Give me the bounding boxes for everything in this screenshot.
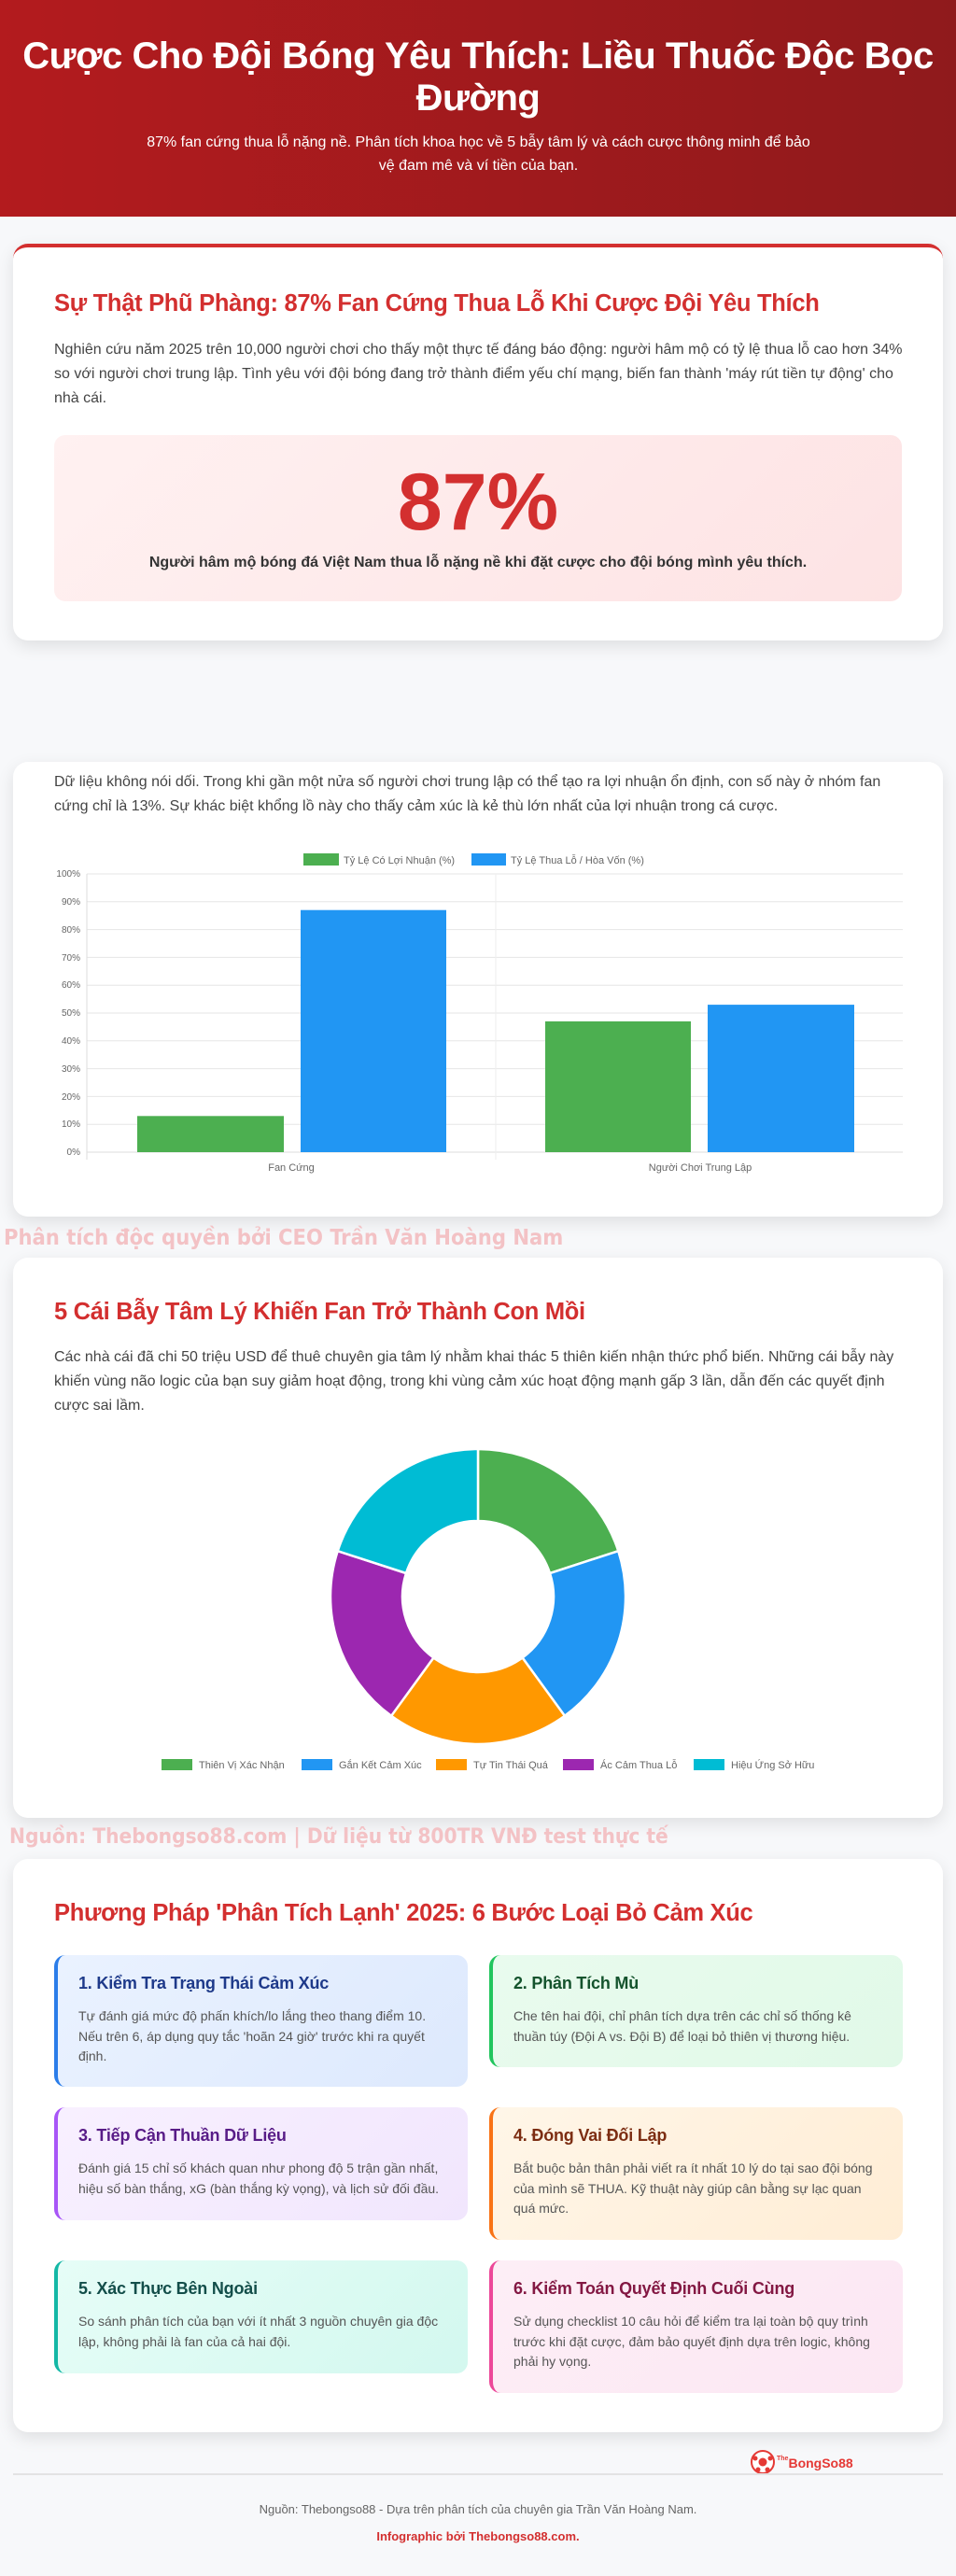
panel: harsh truth: [13, 244, 943, 640]
step 5: So sánh phân tích của bạn với ít nhất 3 nguồn chuyên gia độc lập, không phải là fan của cả hai đội.: [78, 2314, 438, 2349]
step 3: [54, 2107, 468, 2220]
callout: 87% stat: [54, 435, 902, 601]
legend: Tỷ Lệ Thua Lỗ / Hòa Vốn (%): [511, 854, 644, 866]
subtitle: 87% fan cứng thua lỗ nặng nề. Phân tích khoa học về 5 bẫy tâm lý và cách cược thông minh để bảo vệ đam mê và ví tiền của bạn.: [147, 134, 810, 174]
legend: [303, 853, 644, 866]
bars: [137, 910, 854, 1152]
step 3: Đánh giá 15 chỉ số khách quan như phong độ 5 trận gần nhất, hiệu số bàn thắng, xG (bàn thắng kỳ vọng), và lịch sử đối đầu.: [78, 2161, 439, 2196]
icon: logo: TheBongSo88: [777, 2456, 853, 2470]
bar chart: 90%: [62, 897, 80, 908]
step 5: [54, 2260, 468, 2373]
bar chart: 60%: [62, 980, 80, 991]
title: Cược Cho Đội Bóng Yêu Thích: Liều Thuốc Độc Bọc Đường: [22, 35, 934, 119]
bar chart: 40%: [62, 1036, 80, 1047]
watermark: Phân tích độc quyền bởi CEO Trần Văn Hoàng Nam: [4, 1224, 563, 1250]
text block: Nghiên cứu năm 2025 trên 10,000 người chơi cho thấy một thực tế đáng báo động: người hâm mộ có tỷ lệ thua lỗ cao hơn 34% so với người chơi trung lập. Tình yêu với đội bóng đang trở thành điểm yếu chí mạng, biến fan thành 'máy rút tiền tự động' cho nhà cái.: [54, 342, 902, 406]
step 6: [489, 2260, 903, 2393]
step 2: 2. Phân Tích Mù: [513, 1974, 639, 1992]
heading: 5 Cái Bẫy Tâm Lý Khiến Fan Trở Thành Con Mồi: [54, 1299, 585, 1325]
bar chart: Người Chơi Trung Lập: [649, 1162, 752, 1174]
bar chart: 0%: [67, 1147, 80, 1158]
step 1: Tự đánh giá mức độ phấn khích/lo lắng theo thang điểm 10. Nếu trên 6, áp dụng quy tắc 'hoãn 24 giờ' trước khi ra quyết định.: [78, 2008, 426, 2063]
donut legend: Hiệu Ứng Sở Hữu: [731, 1759, 814, 1771]
text block: Các nhà cái đã chi 50 triệu USD để thuê chuyên gia tâm lý nhằm khai thác 5 thiên kiến nhận thức phổ biến. Những cái bẫy này khiến vùng não logic của bạn suy giảm hoạt động, trong khi vùng cảm xúc hoạt động mạnh gấp 3 lần, dẫn đến các quyết định cược sai lầm.: [54, 1349, 893, 1414]
footer text: Nguồn: Thebongso88 - Dựa trên phân tích của chuyên gia Trần Văn Hoàng Nam.: [260, 2502, 696, 2516]
step 2: [489, 1955, 903, 2067]
bar chart: 70%: [62, 953, 80, 964]
donut legend: Ác Cảm Thua Lỗ: [600, 1759, 677, 1771]
callout: 87% stat: Người hâm mộ bóng đá Việt Nam thua lỗ nặng nề khi đặt cược cho đội bóng mình yêu thích.: [149, 555, 807, 570]
header: [0, 0, 956, 217]
bar chart: Fan Cứng: [268, 1162, 315, 1174]
legend: Tỷ Lệ Có Lợi Nhuận (%): [344, 855, 455, 866]
callout: 87% stat: 87%: [398, 457, 558, 547]
panel: psychological traps: [13, 1258, 943, 1818]
step 6: 6. Kiểm Toán Quyết Định Cuối Cùng: [513, 2279, 794, 2298]
footer credit: Infographic bởi Thebongso88.com.: [376, 2529, 580, 2543]
step 4: Bắt buộc bản thân phải viết ra ít nhất 10 lý do tại sao đội bóng của mình sẽ THUA. Kỹ thuật này giúp cân bằng sự lạc quan quá mức.: [513, 2161, 872, 2216]
donut legend: Gắn Kết Cảm Xúc: [339, 1759, 422, 1771]
watermark: Nguồn: Thebongso88.com | Dữ liệu từ 800TR VNĐ test thực tế: [9, 1824, 668, 1849]
step 6: Sử dụng checklist 10 câu hỏi để kiểm tra lại toàn bộ quy trình trước khi đặt cược, đảm bảo quyết định dựa trên logic, không phải hy vọng.: [513, 2314, 870, 2369]
step 4: [489, 2107, 903, 2240]
bar chart: 100%: [56, 869, 80, 880]
panel: 6 steps method: [13, 1859, 943, 2432]
donut legend: Thiên Vị Xác Nhận: [199, 1760, 285, 1771]
bar chart: 10%: [62, 1119, 80, 1130]
bar chart: 80%: [62, 925, 80, 936]
step 3: 3. Tiếp Cận Thuần Dữ Liệu: [78, 2126, 287, 2145]
text block: Dữ liệu không nói dối. Trong khi gần một nửa số người chơi trung lập có thể tạo ra lợi nhuận ổn định, con số này ở nhóm fan cứng chỉ là 13%. Sự khác biệt khổng lồ này cho thấy cảm xúc là kẻ thù lớn nhất của lợi nhuận trong cá cược.: [54, 774, 880, 814]
donut legend: [162, 1759, 814, 1771]
icon: logo: [751, 2450, 853, 2473]
donut chart: [331, 1450, 625, 1743]
step 5: 5. Xác Thực Bên Ngoài: [78, 2279, 258, 2298]
step 1: 1. Kiểm Tra Trạng Thái Cảm Xúc: [78, 1974, 329, 1992]
bar chart: 30%: [62, 1064, 80, 1075]
donut legend: Tự Tin Thái Quá: [473, 1760, 549, 1771]
bar chart: 50%: [62, 1008, 80, 1019]
step 2: Che tên hai đội, chỉ phân tích dựa trên các chỉ số thống kê thuần túy (Đội A vs. Đội B) để loại bỏ thiên vị thương hiệu.: [513, 2008, 851, 2043]
bar chart: 20%: [62, 1092, 80, 1103]
heading: Sự Thật Phũ Phàng: 87% Fan Cứng Thua Lỗ Khi Cược Đội Yêu Thích: [54, 290, 820, 317]
step 1: [54, 1955, 468, 2087]
step 4: 4. Đóng Vai Đối Lập: [513, 2126, 667, 2145]
bar chart: [56, 853, 903, 1174]
heading: Phương Pháp 'Phân Tích Lạnh' 2025: 6 Bước Loại Bỏ Cảm Xúc: [54, 1900, 752, 1926]
panel: bar chart section: [13, 762, 943, 1217]
